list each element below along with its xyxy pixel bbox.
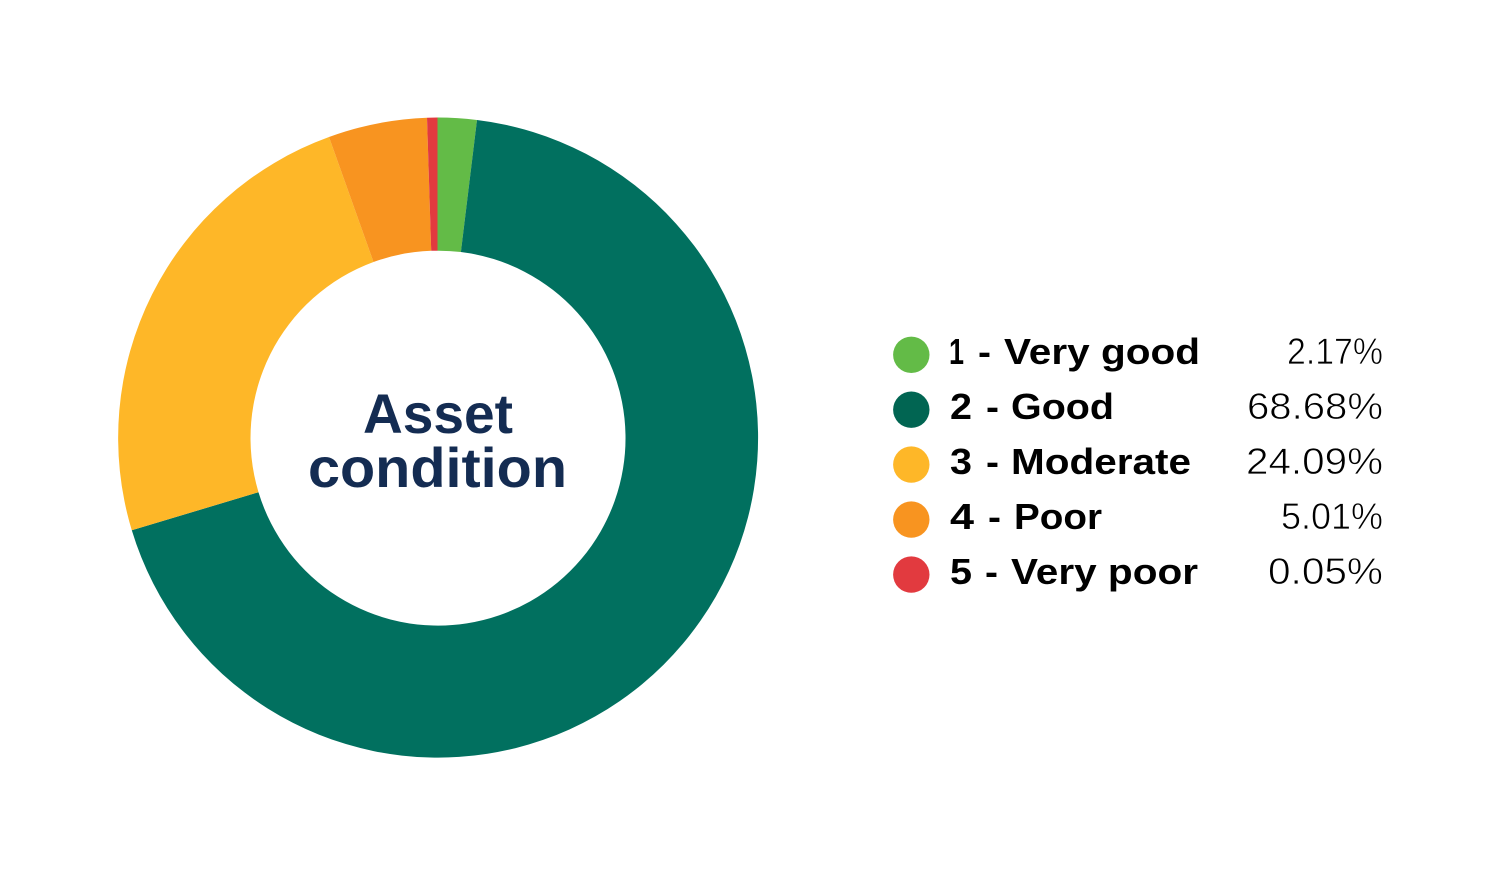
segment: 4 - Poor	[329, 118, 431, 262]
segment: 1 - Very good	[438, 118, 477, 252]
legend row: 1 - Very good: 2.17%	[1287, 331, 1383, 372]
segment: 5 - Very poor	[427, 118, 438, 251]
legend row: 2 - Good: 2	[950, 386, 972, 427]
donut centre title	[308, 382, 567, 499]
legend	[893, 331, 1383, 593]
legend row: 3 - Moderate: 24.09%	[1246, 441, 1383, 482]
legend row: 5 - Very poor	[893, 551, 1383, 593]
segment: 3 - Moderate	[118, 137, 374, 530]
legend row: 4 - Poor	[893, 496, 1383, 538]
legend row: 5 - Very poor: 5	[950, 551, 972, 592]
legend row: 3 - Moderate	[893, 441, 1383, 483]
legend row: 4 - Poor: 5.01%	[1281, 496, 1383, 537]
legend row: 3 - Moderate: -	[986, 441, 999, 482]
legend row: 4 - Poor: Poor	[1014, 496, 1102, 537]
legend row: 1 - Very good: Very good	[1004, 331, 1200, 372]
legend row: 1 - Very good: 1	[949, 331, 964, 372]
legend row: 5 - Very poor: -	[985, 551, 998, 592]
legend row: 2 - Good: 68.68%	[1247, 386, 1383, 427]
donut centre title: condition	[308, 436, 567, 499]
legend row: 5 - Very poor: Very poor	[1011, 551, 1198, 592]
donut centre title: Asset	[363, 382, 513, 445]
segment: 2 - Good	[132, 120, 758, 758]
legend row: 1 - Very good: -	[978, 331, 991, 372]
legend row: 2 - Good	[893, 386, 1383, 428]
legend row: 5 - Very poor: 0.05%	[1268, 551, 1383, 592]
legend row: 3 - Moderate: Moderate	[1011, 441, 1191, 482]
legend row: 2 - Good: -	[986, 386, 999, 427]
legend row: 1 - Very good	[893, 331, 1383, 373]
donut chart	[118, 118, 758, 758]
legend row: 2 - Good: Good	[1011, 386, 1114, 427]
legend row: 4 - Poor: -	[988, 496, 1001, 537]
legend row: 3 - Moderate: 3	[950, 441, 972, 482]
legend row: 4 - Poor: 4	[950, 496, 974, 537]
